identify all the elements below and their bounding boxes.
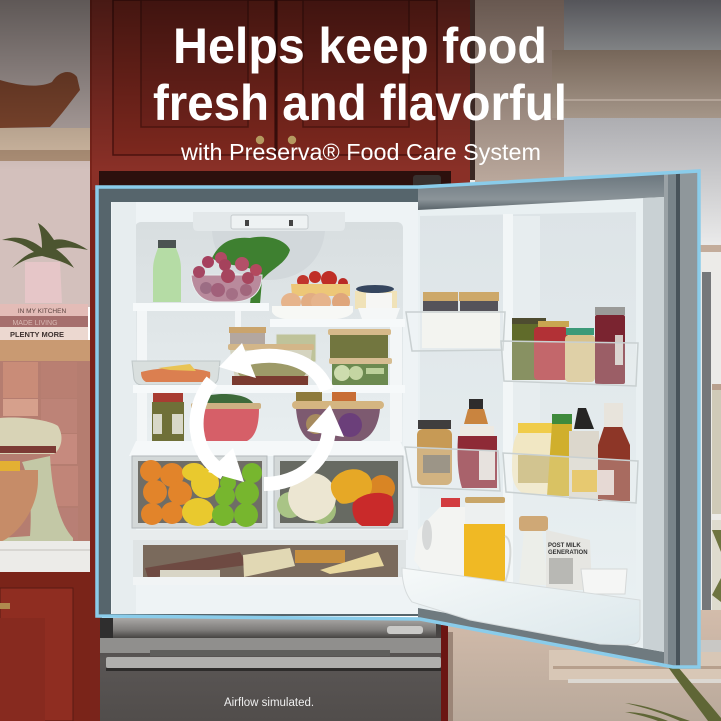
shelf 1 right xyxy=(270,319,405,327)
title: fresh and flavorful xyxy=(153,75,567,131)
limes xyxy=(212,463,262,527)
bin lower left xyxy=(405,447,500,491)
upper red cabinet surrounding fridge xyxy=(90,0,470,721)
grapes bowl xyxy=(191,252,262,302)
orange pepper xyxy=(369,475,395,501)
arrow top xyxy=(219,343,327,390)
books stack: IN MY KITCHEN xyxy=(18,308,66,315)
oranges xyxy=(140,460,192,525)
open fridge door xyxy=(418,170,700,668)
blueberries carton xyxy=(355,285,400,319)
green juice bottle xyxy=(153,240,181,302)
juice pitcher xyxy=(464,497,510,583)
strawberries in box xyxy=(291,271,350,296)
wooden shelf upper xyxy=(0,128,91,161)
books stack: MADE LIVING xyxy=(12,320,58,327)
icon: plant leaf behind window xyxy=(712,530,721,602)
door bin items: top xyxy=(422,292,625,384)
air duct xyxy=(212,231,325,280)
floor beige below door xyxy=(441,610,721,721)
milk jug xyxy=(414,498,470,577)
bin top right xyxy=(501,341,638,386)
shelf supports xyxy=(137,311,402,442)
mustard bottle xyxy=(547,414,572,496)
icon: plant leaves xyxy=(625,667,721,721)
cabinet knobs xyxy=(256,136,296,144)
blue outline of the fridge xyxy=(97,171,699,667)
airflow arrows xyxy=(197,343,344,484)
lower door shelf xyxy=(402,568,640,645)
fridge interior body xyxy=(97,186,420,616)
background: right side room and window xyxy=(441,0,721,721)
crisper drawer: fruit xyxy=(132,456,267,528)
peanut jar xyxy=(417,420,452,485)
jars behind salad xyxy=(296,392,356,401)
white counter xyxy=(0,541,90,572)
freezer drawer and handle xyxy=(100,618,441,721)
pickled jar xyxy=(276,334,316,362)
cucumber container xyxy=(329,358,392,385)
lower shelf xyxy=(0,340,90,361)
milk carton: POST MILK xyxy=(548,543,581,549)
grain container xyxy=(328,329,391,358)
bottom door bin items xyxy=(402,497,640,645)
syrup bottle xyxy=(464,399,488,424)
salmon dish xyxy=(132,361,220,385)
arrow right xyxy=(264,405,344,484)
cauliflower xyxy=(277,473,336,524)
glass shelf xyxy=(129,441,407,456)
handle xyxy=(106,650,441,671)
shelf 1 left xyxy=(133,303,269,311)
airflow note: Airflow simulated. xyxy=(224,697,314,709)
parsley greens xyxy=(212,237,290,304)
red jar xyxy=(458,426,497,488)
cherries jar xyxy=(595,307,625,384)
barbecue sauce xyxy=(598,403,630,501)
yellow pepper xyxy=(331,469,372,504)
milk carton: GENERATION xyxy=(548,550,588,556)
door bin items: lower xyxy=(417,399,630,501)
background: kitchen left wall and shelves xyxy=(0,0,96,721)
door right gasket layers xyxy=(664,171,698,667)
egg carton xyxy=(272,293,353,320)
top shelf items xyxy=(133,237,405,327)
deli drawer xyxy=(130,530,408,585)
mustard jar xyxy=(565,328,595,382)
shelf 2 xyxy=(133,385,405,393)
carafe with cork xyxy=(519,516,548,585)
mayonnaise xyxy=(512,423,552,494)
middle shelf items xyxy=(132,327,405,393)
pickle jar xyxy=(152,393,184,443)
door top gasket xyxy=(418,170,700,212)
jam jar xyxy=(534,321,569,380)
books stack: PLENTY MORE xyxy=(10,330,64,339)
icon: terracotta bowl xyxy=(0,72,80,128)
terracotta tiles xyxy=(0,361,90,545)
yogurt jars xyxy=(422,292,500,348)
icon: stand mixer xyxy=(0,417,73,549)
recess under cabinet xyxy=(99,171,451,189)
green olives xyxy=(512,318,546,380)
icon: potted plant xyxy=(2,223,88,303)
bin lower right xyxy=(503,453,638,503)
milk carton xyxy=(546,530,592,590)
lower red cabinet xyxy=(0,572,96,721)
lower shelf items xyxy=(129,392,407,456)
arrow left xyxy=(197,381,244,482)
title xyxy=(153,18,567,165)
cabinet doors xyxy=(113,0,275,155)
crisper drawer: vegetables xyxy=(274,456,403,528)
bin top left xyxy=(406,312,505,351)
title: Helps keep food xyxy=(173,18,547,74)
sauce bottle xyxy=(569,408,599,499)
mixed grain bowl xyxy=(228,344,314,385)
salad bowl xyxy=(292,401,384,443)
subtitle: with Preserva® Food Care System xyxy=(180,139,541,165)
door inner liner xyxy=(418,197,664,652)
books stack xyxy=(0,304,88,340)
darkening overlay for title legibility xyxy=(0,0,470,170)
lemons xyxy=(182,463,219,526)
small jar xyxy=(229,327,266,346)
small tub xyxy=(581,569,627,594)
hinge xyxy=(387,626,423,634)
door bins xyxy=(405,312,638,503)
door right liner xyxy=(643,197,664,652)
watermelon bowl xyxy=(191,394,261,443)
red pepper xyxy=(352,493,394,526)
control panel xyxy=(193,212,345,231)
